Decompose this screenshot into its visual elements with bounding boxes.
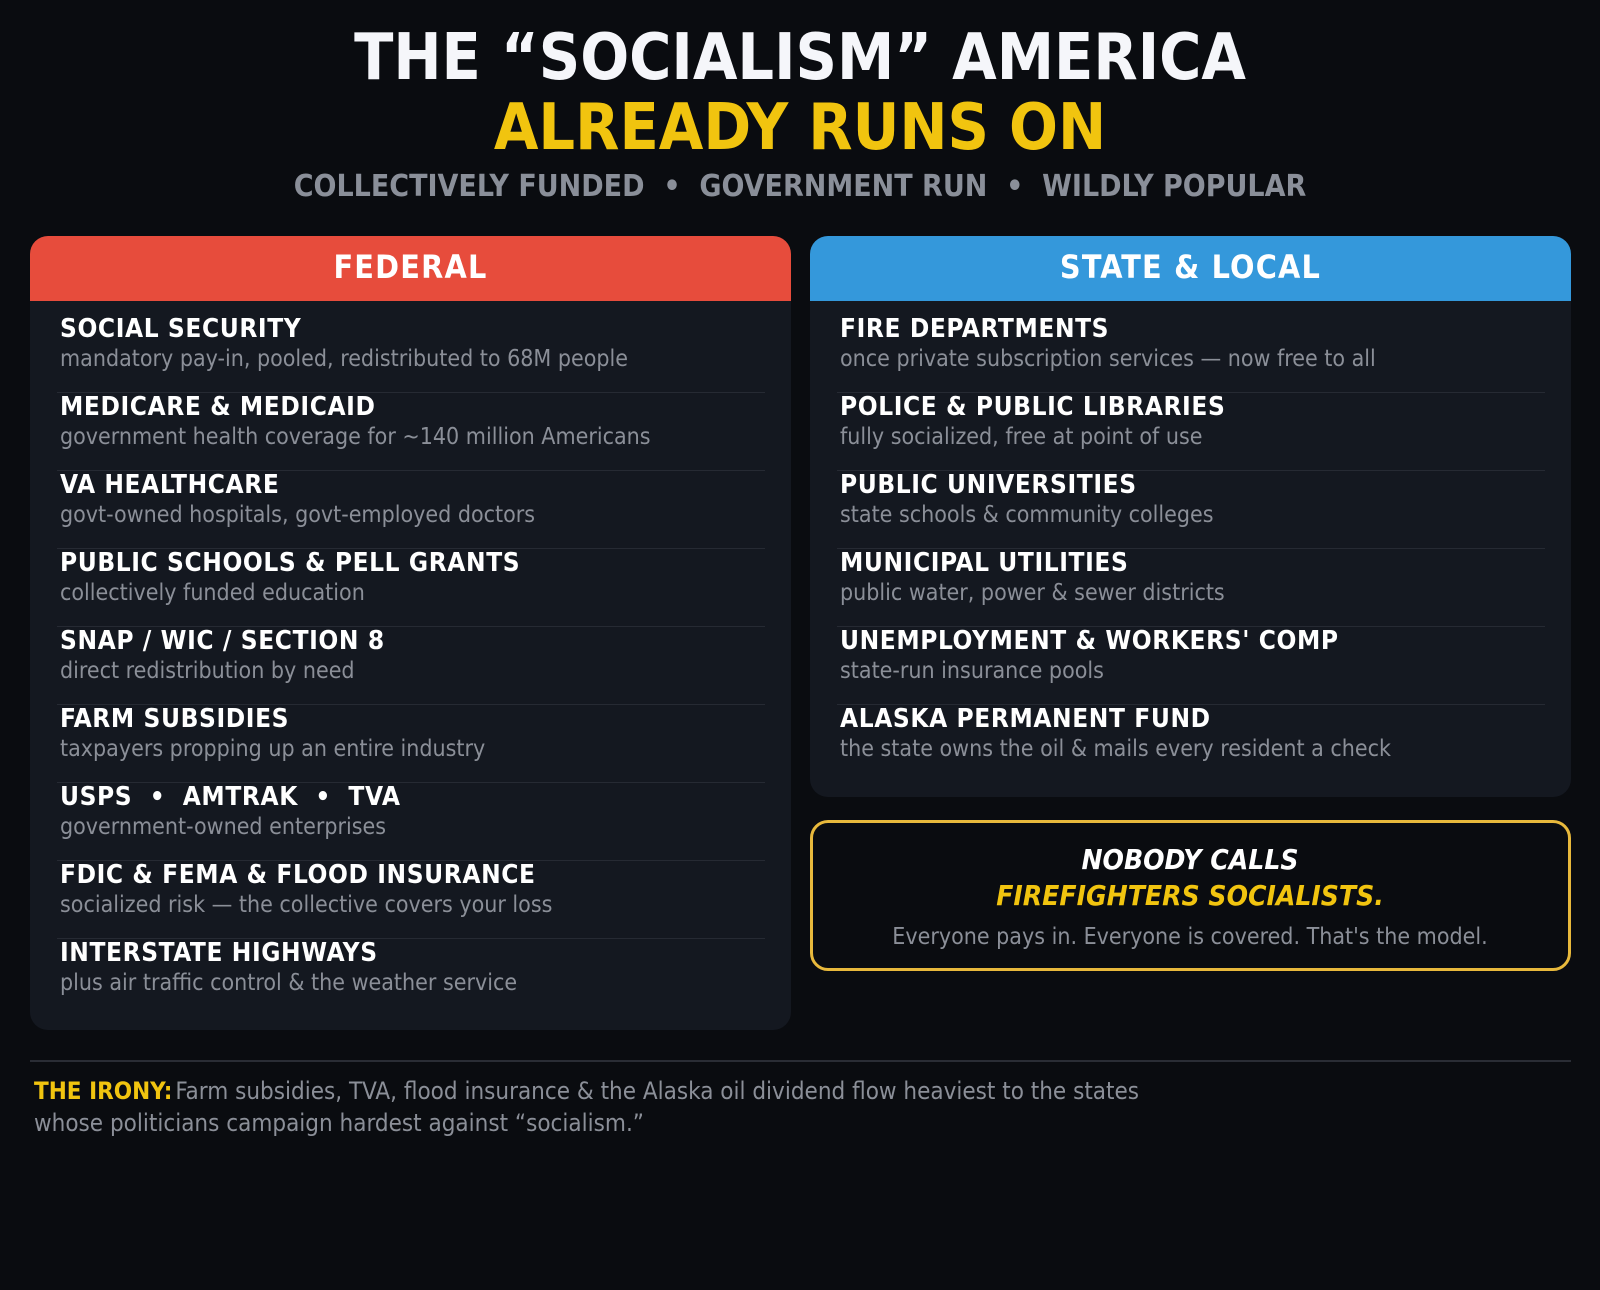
item: highways: INTERSTATE HIGHWAYS	[60, 938, 378, 968]
footer rule	[30, 1060, 1571, 1062]
footnote: whose politicians campaign hardest against “socialism.”	[34, 1109, 644, 1137]
item: va healthcare	[57, 470, 765, 548]
item: alaska	[837, 704, 1545, 782]
item: farm subsidies	[57, 704, 765, 782]
item: police	[837, 392, 1545, 470]
item: universities	[837, 470, 1545, 548]
item: public schools: PUBLIC SCHOOLS & PELL GRANTS	[60, 548, 520, 578]
item: farm subsidies: FARM SUBSIDIES	[60, 704, 289, 734]
item: highways: plus air traffic control & the weather service	[60, 970, 517, 996]
title line 2: ALREADY RUNS ON	[494, 91, 1106, 165]
item: snap: direct redistribution by need	[60, 658, 355, 684]
item: utilities: public water, power & sewer districts	[840, 580, 1225, 606]
item: fire departments	[840, 314, 1376, 372]
item: farm subsidies: taxpayers propping up an entire industry	[60, 736, 485, 762]
item: usps: USPS • AMTRAK • TVA	[60, 782, 401, 812]
item: va healthcare: govt-owned hospitals, govt-employed doctors	[60, 502, 535, 528]
footnote	[34, 1077, 1139, 1137]
item: snap: SNAP / WIC / SECTION 8	[60, 626, 385, 656]
item: medicare: government health coverage for ~140 million Americans	[60, 424, 651, 450]
item: utilities	[837, 548, 1545, 626]
subtitle: COLLECTIVELY FUNDED • GOVERNMENT RUN • WILDLY POPULAR	[294, 169, 1306, 204]
callout line 2: FIREFIGHTERS SOCIALISTS.	[996, 879, 1384, 912]
item: snap	[57, 626, 765, 704]
callout line 1: NOBODY CALLS	[1081, 843, 1299, 876]
federal header: FEDERAL	[333, 248, 488, 286]
item: utilities: MUNICIPAL UTILITIES	[840, 548, 1128, 578]
item: social security: mandatory pay-in, pooled, redistributed to 68M people	[60, 346, 628, 372]
item: va healthcare: VA HEALTHCARE	[60, 470, 279, 500]
title line 1: THE “SOCIALISM” AMERICA	[354, 21, 1246, 95]
item: unemployment: state-run insurance pools	[840, 658, 1104, 684]
item: public schools	[57, 548, 765, 626]
item: social security	[60, 314, 628, 372]
state header	[810, 236, 1571, 301]
item: public schools: collectively funded education	[60, 580, 365, 606]
item: alaska: the state owns the oil & mails every resident a check	[840, 736, 1391, 762]
item: fdic	[57, 860, 765, 938]
item: unemployment	[837, 626, 1545, 704]
item: fire departments: FIRE DEPARTMENTS	[840, 314, 1109, 344]
item: police: fully socialized, free at point of use	[840, 424, 1202, 450]
item: usps	[57, 782, 765, 860]
item: police: POLICE & PUBLIC LIBRARIES	[840, 392, 1225, 422]
item: highways	[57, 938, 765, 1016]
item: usps: government-owned enterprises	[60, 814, 386, 840]
callout	[810, 820, 1571, 971]
federal header	[30, 236, 791, 301]
item: fdic: FDIC & FEMA & FLOOD INSURANCE	[60, 860, 536, 890]
item: universities: state schools & community colleges	[840, 502, 1214, 528]
item: fdic: socialized risk — the collective covers your loss	[60, 892, 552, 918]
panel: state and local	[810, 236, 1571, 797]
footnote: THE IRONY:Farm subsidies, TVA, flood insurance & the Alaska oil dividend flow heaviest to the states	[34, 1077, 1139, 1105]
item: social security: SOCIAL SECURITY	[60, 314, 301, 344]
item: fire departments: once private subscription services — now free to all	[840, 346, 1376, 372]
item: unemployment: UNEMPLOYMENT & WORKERS' COMP	[840, 626, 1339, 656]
item: medicare	[57, 392, 765, 470]
panel: federal	[30, 236, 791, 1030]
item: medicare: MEDICARE & MEDICAID	[60, 392, 376, 422]
callout text: Everyone pays in. Everyone is covered. That's the model.	[892, 924, 1488, 950]
item: alaska: ALASKA PERMANENT FUND	[840, 704, 1211, 734]
item: universities: PUBLIC UNIVERSITIES	[840, 470, 1137, 500]
state header: STATE & LOCAL	[1060, 248, 1321, 286]
